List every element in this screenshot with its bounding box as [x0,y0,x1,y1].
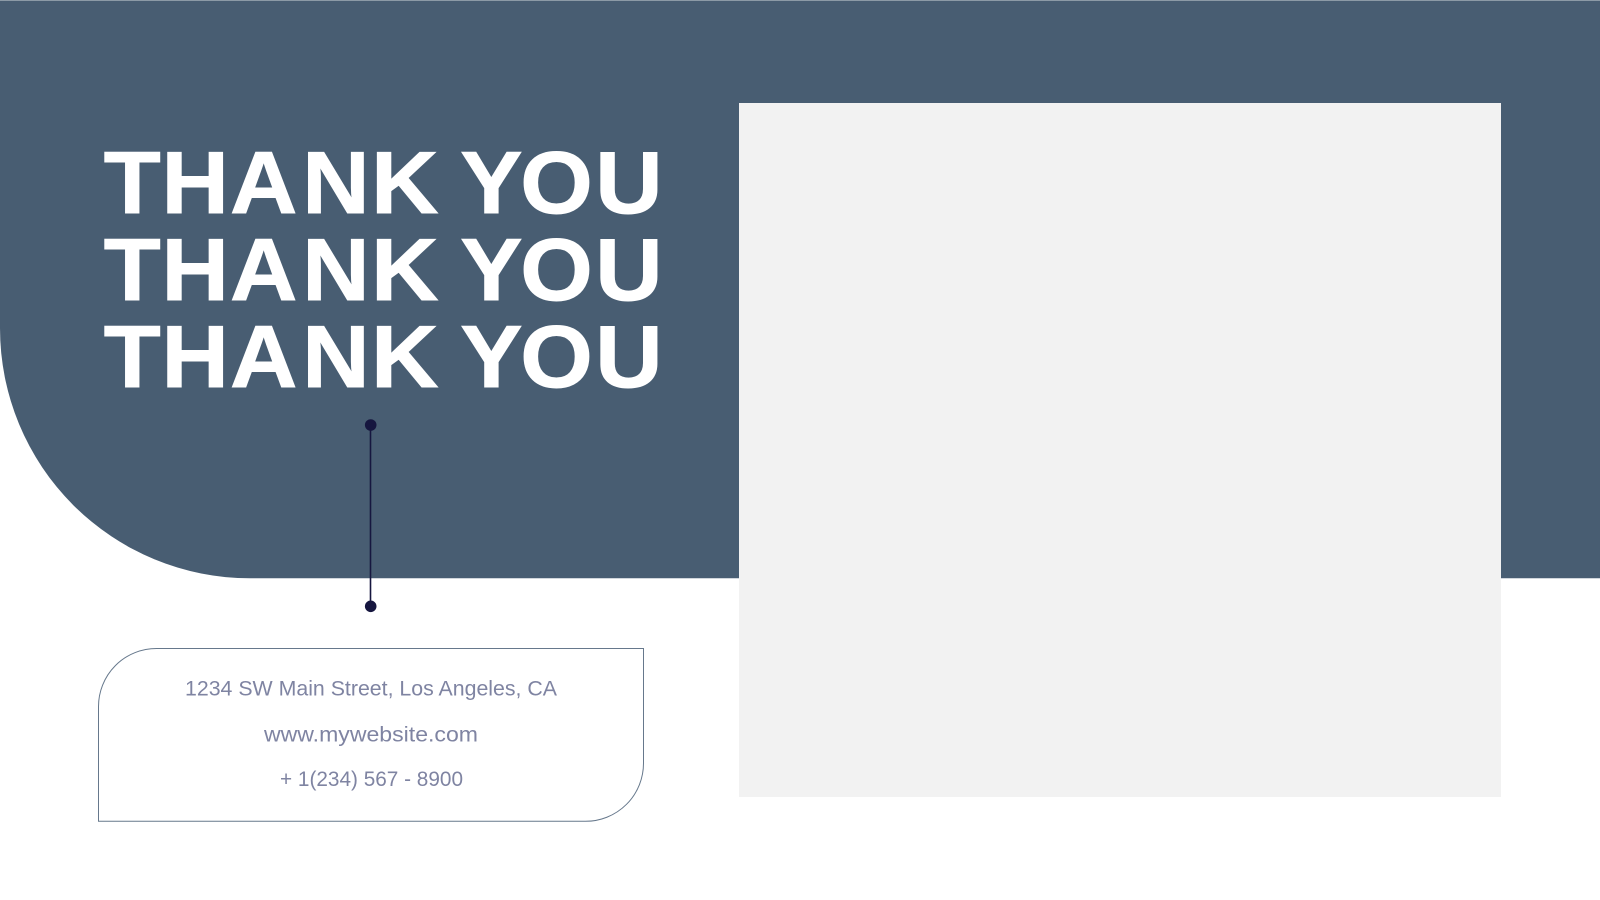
contact box outline [98,648,644,821]
website: www.mywebsite.com [263,724,478,747]
background band [0,0,1600,578]
image placeholder panel [739,103,1501,797]
title line 2: THANK YOU [104,222,663,320]
phone: + 1(234) 567 - 8900 [280,768,463,791]
address: 1234 SW Main Street, Los Angeles, CA [185,678,557,701]
title line 1: THANK YOU [104,134,663,232]
connector line with end dots [365,419,377,612]
title: thank you repeated [104,134,663,407]
contact box [98,648,644,821]
title line 3: THANK YOU [104,309,663,407]
